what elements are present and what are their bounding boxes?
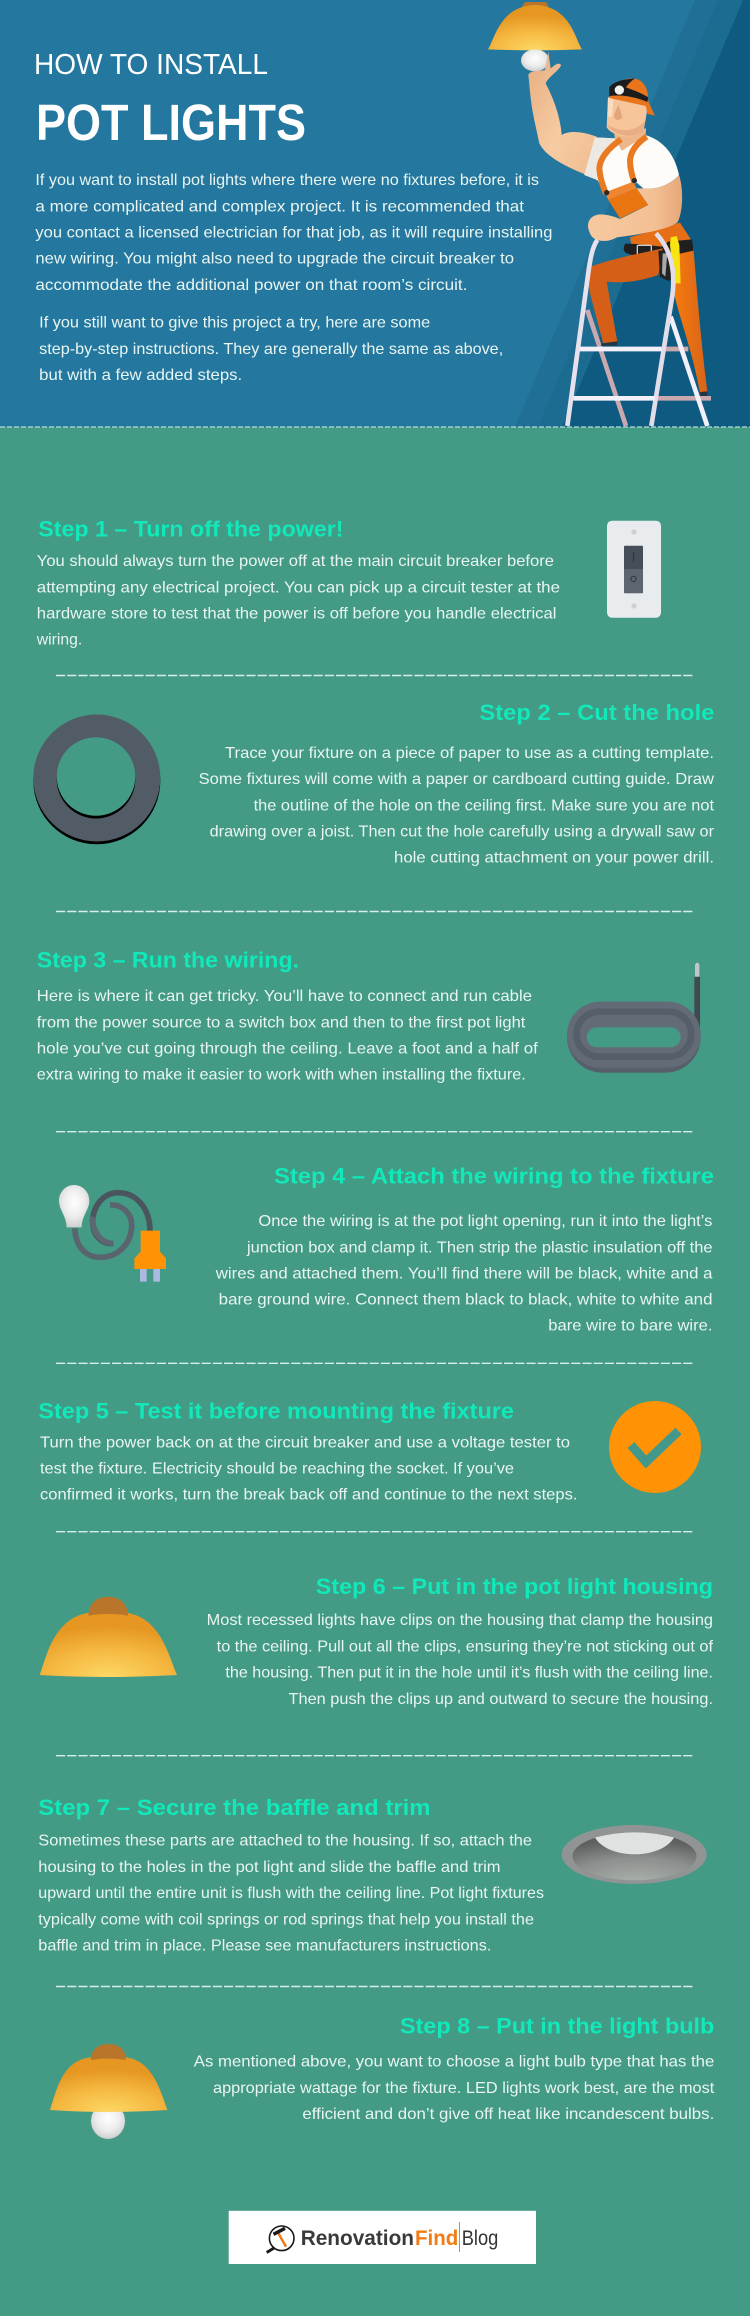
heading: Step 4 – Attach the wiring to the fixture [274,1163,714,1188]
neck [614,128,646,151]
icon: baffle and trim [562,1825,707,1884]
text block: wiring. [36,632,82,649]
logo: RenovationFind Blog: Blog [462,2227,498,2250]
panel: step 3 [37,948,701,1084]
text block: Most recessed lights have clips on the housing that clamp the housing [207,1612,713,1629]
text block: hole you’ve cut going through the ceiling. Leave a foot and a half of [37,1040,538,1057]
text block [215,1213,713,1335]
figure: electrician [528,52,707,396]
text block [199,745,715,867]
panel: step 6 [40,1574,714,1708]
bent arm [588,175,682,241]
panel: step 4 [59,1163,714,1335]
raised arm [528,52,597,175]
text block: efficient and don’t give off heat like incandescent bulbs. [302,2106,714,2123]
icon: cut ring [33,714,160,844]
text block: from the power source to a switch box and then to the first pot light [37,1014,526,1031]
text block: attempting any electrical project. You can pick up a circuit tester at the [37,579,560,596]
icon: check mark [609,1401,701,1493]
icon: light switch [607,521,661,618]
text block: wires and attached them. You’ll find there will be black, white and a [215,1266,713,1283]
logo: RenovationFind Blog: Find [415,2227,458,2250]
panel: step 2 [33,700,715,867]
rear ladder legs [587,310,711,426]
icon: pot light housing [40,1597,177,1677]
text block: typically come with coil springs or rod springs that help you install the [38,1911,534,1928]
overalls straps [599,137,647,194]
text block: the housing. Then put it in the hole until it’s flush with the ceiling line. [225,1665,713,1682]
intro text: but with a few added steps. [39,367,242,384]
illustration: electrician on ladder changing a bulb [488,2,711,426]
intro text: accommodate the additional power on that room’s circuit. [35,277,467,294]
heading: Step 1 – Turn off the power! [38,517,344,542]
icon: magnifier with hammer [267,2226,294,2252]
heading: Step 2 – Cut the hole [479,700,714,725]
text block [37,988,538,1084]
text block: junction box and clamp it. Then strip the plastic insulation off the [246,1239,713,1256]
text block: upward until the entire unit is flush with the ceiling line. Pot light fixtures [38,1885,544,1902]
text block: You should always turn the power off at the main circuit breaker before [37,553,554,570]
text block: Trace your fixture on a piece of paper to use as a cutting template. [225,745,714,762]
intro text [35,172,552,384]
icon: coiled wire [567,965,701,1073]
logo: RenovationFind Blog [229,2211,536,2264]
panel: step 8 [50,2014,715,2139]
text block [40,1434,578,1504]
icon: ceiling lamp [488,2,582,71]
logo: RenovationFind Blog: Renovation [301,2227,414,2250]
raised leg [586,248,663,344]
text block: Once the wiring is at the pot light opening, run it into the light’s [258,1213,712,1230]
title: POT LIGHTS [36,94,306,151]
heading: Step 6 – Put in the pot light housing [316,1574,713,1599]
overalls bib [605,182,637,200]
hard hat [609,79,655,116]
text block: hardware store to test that the power is off before you handle electrical [37,606,557,623]
text block: bare wire to bare wire. [548,1318,712,1335]
text block: Some fixtures will come with a paper or cardboard cutting guide. Draw [199,771,714,788]
text block: Sometimes these parts are attached to the housing. If so, attach the [38,1833,532,1850]
tool belt [624,239,693,257]
text block [207,1612,714,1708]
text block: to the ceiling. Pull out all the clips, ensuring they’re not sticking out of [217,1638,714,1655]
text block: drawing over a joist. Then cut the hole carefully using a drywall saw or [210,824,715,841]
text block: Then push the clips up and outward to secure the housing. [288,1691,713,1708]
intro text: you contact a licensed electrician for that job, as it will require installing [35,225,552,242]
text block: housing to the holes in the pot light and slide the baffle and trim [38,1859,500,1876]
head [607,97,648,136]
text block [38,1833,544,1955]
standing leg [674,248,707,393]
panel: step 7 [38,1795,707,1955]
panel: header [0,0,750,427]
text block: As mentioned above, you want to choose a light bulb type that has the [194,2054,714,2070]
intro text: If you still want to give this project a try, here are some [39,315,430,332]
text block [194,2054,715,2123]
icon: lamp with bulb [50,2044,168,2139]
heading: Step 3 – Run the wiring. [37,948,299,973]
text block [36,553,560,649]
intro text: step-by-step instructions. They are generally the same as above, [39,341,503,358]
tool pouch [658,250,677,281]
intro text: If you want to install pot lights where there were no fixtures before, it is [35,172,539,189]
text block: confirmed it works, turn the break back off and continue to the next steps. [40,1487,578,1504]
text block: appropriate wattage for the fixture. LED lights work best, are the most [213,2080,715,2097]
text block: the outline of the hole on the ceiling first. Make sure you are not [254,797,715,814]
title: HOW TO INSTALL [34,49,268,81]
heading: Step 8 – Put in the light bulb [400,2014,714,2039]
panel: step 1 [36,517,661,649]
text block: baffle and trim in place. Please see manufacturers instructions. [38,1938,491,1955]
intro text: a more complicated and complex project. It is recommended that [35,198,525,215]
heading: Step 5 – Test it before mounting the fixture [38,1398,514,1423]
ladder front frame [567,233,673,426]
text block: test the fixture. Electricity should be reaching the socket. If you’ve [40,1460,514,1477]
text block: Here is where it can get tricky. You’ll have to connect and run cable [37,988,532,1005]
text block: extra wiring to make it easier to work with when installing the fixture. [37,1067,526,1084]
title [34,49,306,151]
text block: hole cutting attachment on your power drill. [394,850,714,867]
panel: step 5 [38,1398,701,1504]
undershirt [584,135,679,198]
text block: bare ground wire. Connect them black to black, white to white and [219,1292,712,1309]
text block: Turn the power back on at the circuit breaker and use a voltage tester to [40,1434,570,1451]
intro text: new wiring. You might also need to upgrade the circuit breaker to [35,251,514,268]
heading: Step 7 – Secure the baffle and trim [38,1795,431,1820]
icon: bulb with cord and plug [59,1185,166,1282]
